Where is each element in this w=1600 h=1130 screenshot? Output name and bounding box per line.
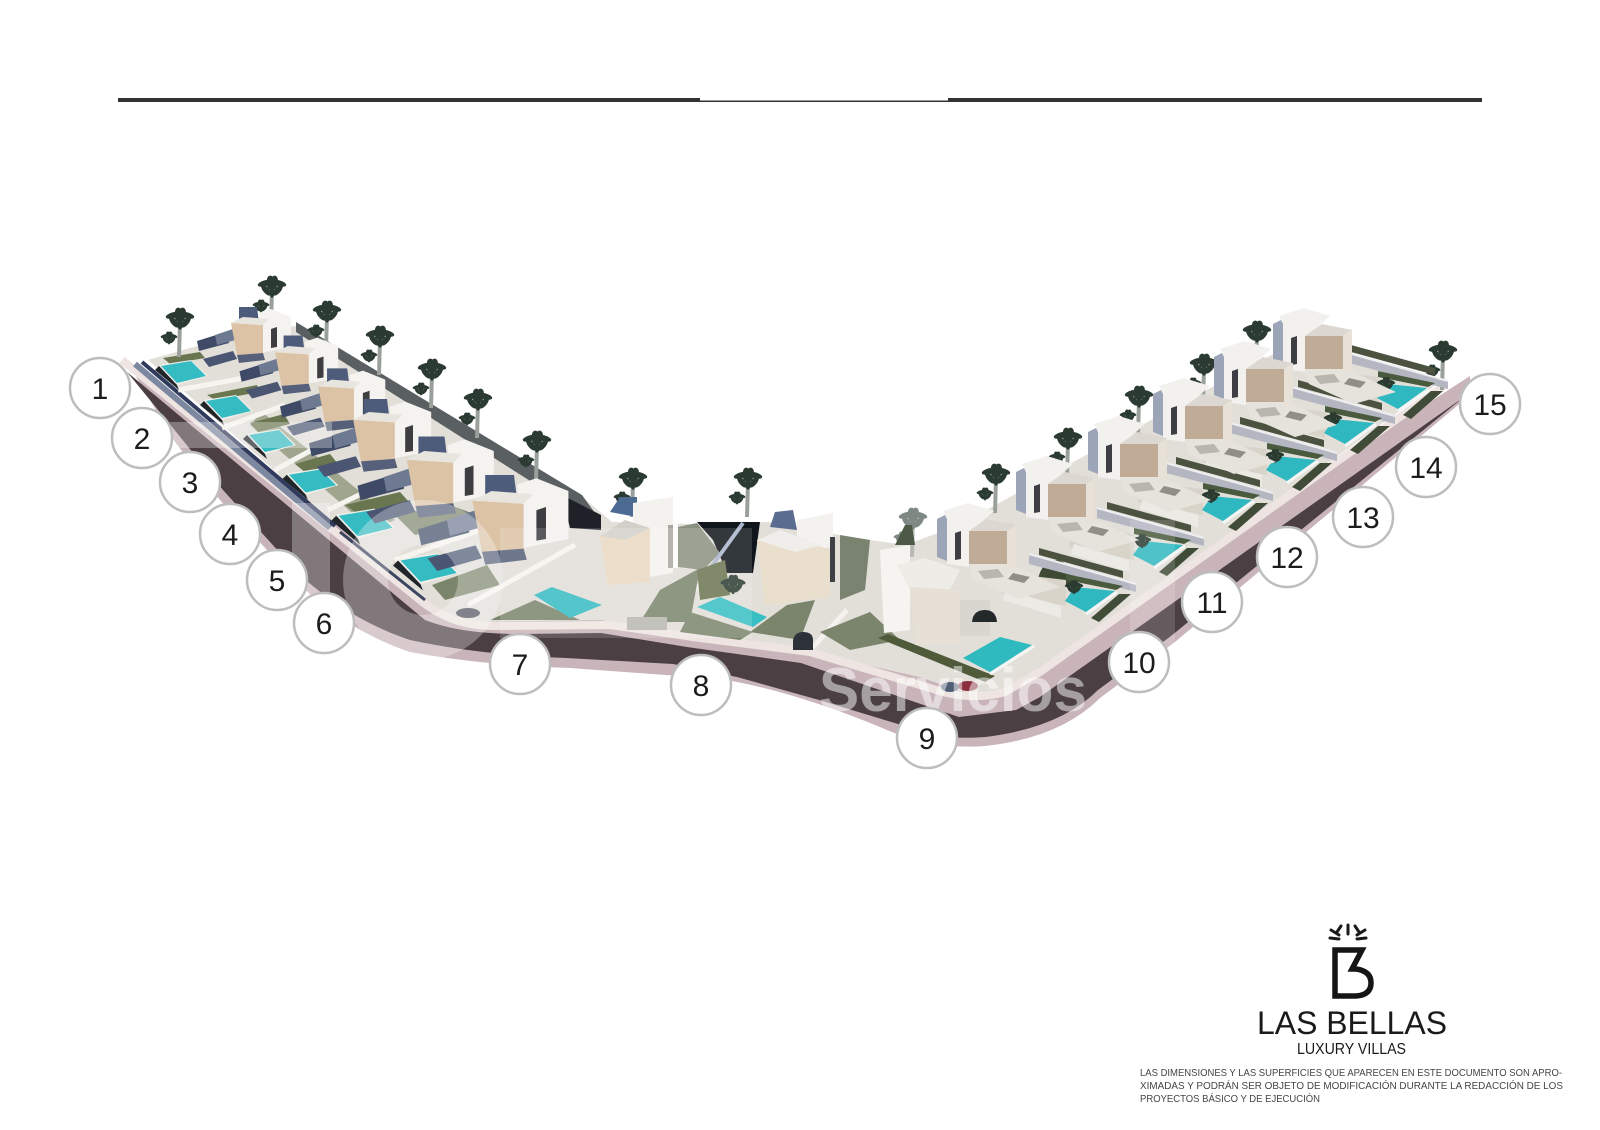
disclaimer: XIMADAS Y PODRÁN SER OBJETO DE MODIFICACIÓN DURANTE LA REDACCIÓN DE LOS bbox=[1140, 1079, 1563, 1092]
marker 4: 4 bbox=[222, 519, 238, 552]
marker 9 bbox=[897, 708, 957, 768]
disclaimer: PROYECTOS BÁSICO Y DE EJECUCIÓN bbox=[1140, 1092, 1320, 1105]
marker 1: 1 bbox=[92, 373, 108, 406]
marker 15: 15 bbox=[1473, 389, 1507, 422]
logo: Las Bellas bbox=[1257, 925, 1447, 1058]
marker 11: 11 bbox=[1196, 587, 1228, 620]
marker 15 bbox=[1460, 374, 1520, 434]
villas left row bbox=[197, 307, 568, 571]
marker 3: 3 bbox=[182, 467, 198, 500]
brand name: LAS BELLAS bbox=[1257, 1005, 1447, 1041]
marker 13: 13 bbox=[1346, 502, 1380, 535]
white plot walls left row bbox=[178, 377, 575, 605]
marker 11 bbox=[1182, 572, 1242, 632]
villas and pools, centre bbox=[456, 497, 1034, 692]
pools and plots, right row bbox=[1001, 345, 1448, 622]
site base bbox=[122, 326, 1445, 696]
marker 2: 2 bbox=[134, 423, 150, 456]
marker 8: 8 bbox=[693, 670, 709, 703]
marker 12: 12 bbox=[1270, 542, 1304, 575]
marker 5 bbox=[247, 550, 307, 610]
marker 5: 5 bbox=[269, 565, 285, 598]
watermark shapes bbox=[170, 422, 1175, 660]
icon: sunburst bbox=[1330, 925, 1366, 939]
back walls and dark wedges bbox=[296, 322, 870, 647]
marker 1 bbox=[70, 358, 130, 418]
marker 8 bbox=[671, 655, 731, 715]
marker 10 bbox=[1109, 632, 1169, 692]
numbered markers bbox=[70, 358, 1520, 768]
icon: B monogram bbox=[1335, 950, 1371, 996]
marker 6: 6 bbox=[316, 608, 332, 641]
lawns bbox=[163, 352, 1078, 682]
marker 3 bbox=[160, 452, 220, 512]
marker 7: 7 bbox=[512, 649, 528, 682]
marker 7 bbox=[490, 634, 550, 694]
marker 2 bbox=[112, 408, 172, 468]
road bbox=[125, 358, 1470, 747]
tagline: LUXURY VILLAS bbox=[1297, 1041, 1406, 1058]
marker 9: 9 bbox=[919, 723, 935, 756]
disclaimer: LAS DIMENSIONES Y LAS SUPERFICIES QUE APARECEN EN ESTE DOCUMENTO SON APRO- bbox=[1140, 1067, 1562, 1079]
villas right row bbox=[937, 308, 1396, 599]
marker 6 bbox=[294, 593, 354, 653]
palms bbox=[160, 276, 1458, 557]
marker 10: 10 bbox=[1122, 647, 1156, 680]
pools, left row bbox=[155, 360, 459, 590]
marker 14: 14 bbox=[1409, 452, 1443, 485]
marker 14 bbox=[1396, 437, 1456, 497]
disclaimer bbox=[1140, 1067, 1563, 1105]
marker 13 bbox=[1333, 487, 1393, 547]
header rule bbox=[118, 96, 1482, 102]
marker 12 bbox=[1257, 527, 1317, 587]
marker 4 bbox=[200, 504, 260, 564]
watermark text: Servicios bbox=[819, 656, 1087, 725]
